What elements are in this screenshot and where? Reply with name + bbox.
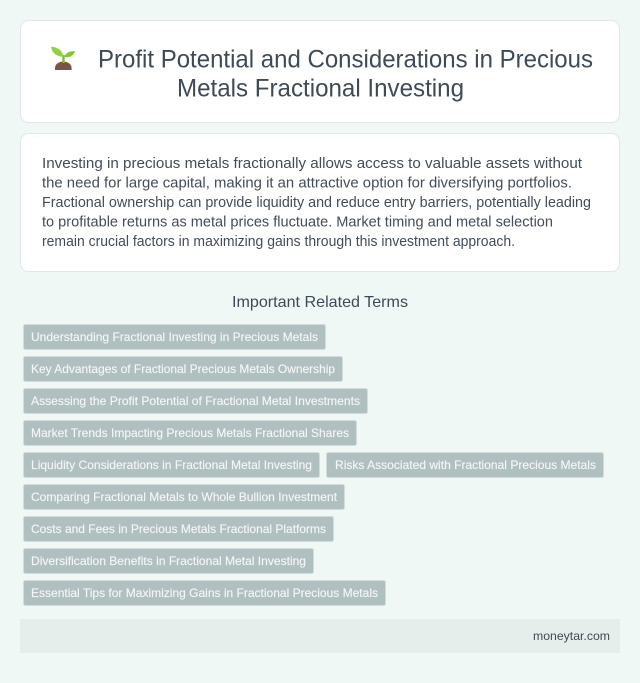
panel: title card — [20, 20, 620, 122]
tag: costs: Costs and Fees in Precious Metals Fractional Platforms — [31, 522, 326, 536]
title: Profit Potential and Considerations in Precious — [98, 46, 593, 74]
tag: costs — [24, 516, 334, 542]
panel: intro text card — [20, 134, 620, 272]
tag: diversification — [24, 548, 314, 574]
intro paragraph: to profitable returns as metal prices fluctuate. Market timing and metal selection — [42, 214, 553, 230]
intro paragraph: the need for large capital, making it an attractive option for diversifying portfolios. — [42, 176, 572, 192]
tag: essential tips: Essential Tips for Maximizing Gains in Fractional Precious Metals — [31, 586, 378, 600]
footer source: moneytar.com — [533, 629, 610, 643]
footer bar — [20, 619, 620, 653]
tag: profit potential — [24, 388, 368, 414]
icon: seedling — [51, 47, 75, 70]
intro paragraph: Fractional ownership can provide liquidity and reduce entry barriers, potentially leading — [42, 195, 591, 211]
tag: risks — [326, 452, 604, 478]
tag: market trends: Market Trends Impacting Precious Metals Fractional Shares — [31, 426, 349, 440]
tag: comparing: Comparing Fractional Metals to Whole Bullion Investment — [31, 490, 338, 504]
title: Metals Fractional Investing — [177, 74, 464, 102]
tag: understanding — [24, 324, 326, 350]
tag: essential tips — [24, 580, 386, 606]
tag: diversification: Diversification Benefits in Fractional Metal Investing — [31, 554, 306, 568]
intro paragraph — [42, 156, 591, 250]
tag: liquidity: Liquidity Considerations in Fractional Metal Investing — [31, 458, 312, 472]
tag: market trends — [24, 420, 356, 446]
intro paragraph: remain crucial factors in maximizing gains through this investment approach. — [42, 234, 515, 250]
intro paragraph: Investing in precious metals fractionally allows access to valuable assets without — [42, 156, 582, 172]
panel: related term tags — [24, 324, 604, 606]
tag: comparing — [24, 484, 344, 510]
tag: understanding: Understanding Fractional Investing in Precious Metals — [31, 330, 318, 344]
tag: liquidity — [24, 452, 320, 478]
tag: key advantages: Key Advantages of Fractional Precious Metals Ownership — [31, 362, 335, 376]
tag: key advantages — [24, 356, 342, 382]
tag: profit potential: Assessing the Profit Potential of Fractional Metal Investments — [31, 394, 360, 408]
section heading: Important Related Terms — [232, 294, 408, 311]
tag: risks: Risks Associated with Fractional Precious Metals — [335, 458, 596, 472]
title — [98, 46, 593, 102]
